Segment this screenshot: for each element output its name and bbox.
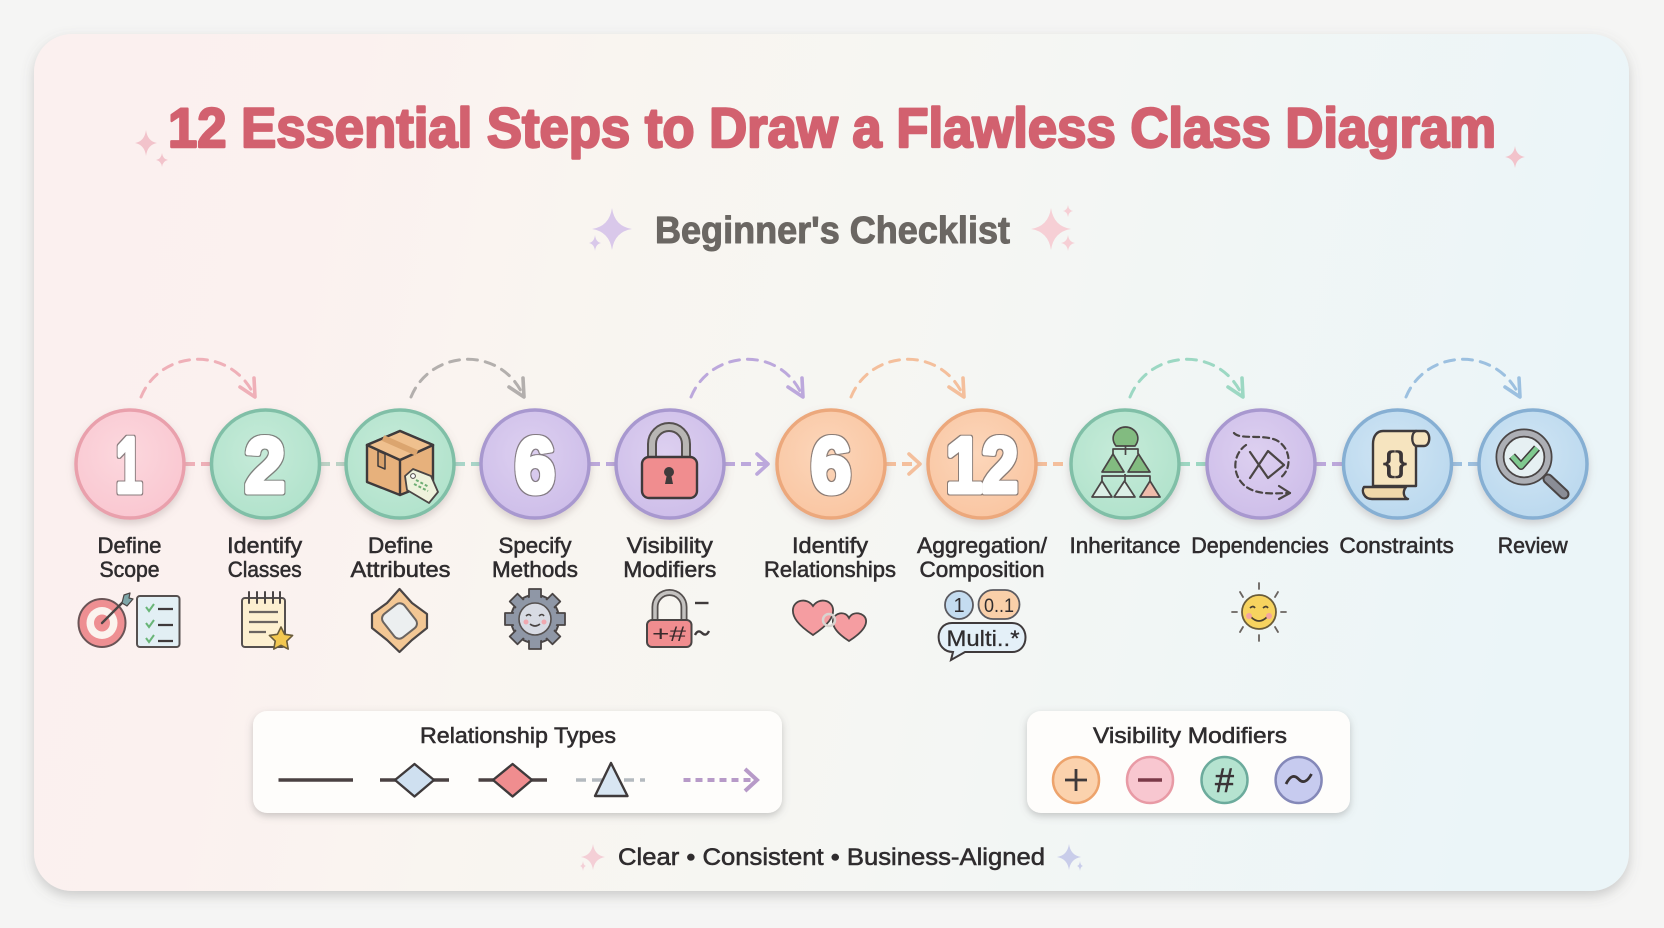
step circle 6 bbox=[777, 410, 885, 518]
icon: smiling sun bbox=[1232, 583, 1286, 641]
icon: rounded diamond tag bbox=[372, 589, 427, 652]
label: Identify bbox=[792, 533, 868, 558]
step 4: Specify Methods bbox=[481, 410, 589, 649]
step circle 3 bbox=[346, 410, 454, 518]
label: Specify bbox=[498, 533, 572, 558]
arrow: arc 5 to 6 bbox=[691, 359, 803, 397]
panel: visibility modifiers legend bbox=[1027, 711, 1350, 813]
label: Scope bbox=[100, 557, 160, 582]
step circle 1 bbox=[76, 410, 184, 518]
arrow: arc 6 to 7 bbox=[851, 359, 964, 397]
aggregation diamond bbox=[380, 764, 449, 796]
hash protected bbox=[1202, 757, 1248, 803]
curved arrows between steps bbox=[141, 359, 1520, 397]
step number 6: 6 bbox=[811, 421, 851, 509]
step 5: Visibility Modifiers bbox=[616, 410, 724, 647]
hash protected: # bbox=[1215, 762, 1234, 800]
label: Review bbox=[1498, 533, 1568, 558]
step circle 4 bbox=[481, 410, 589, 518]
footer tagline: Clear • Consistent • Business-Aligned bbox=[618, 844, 1045, 871]
dependency arrow bbox=[684, 769, 757, 791]
title sparkles bbox=[135, 130, 1525, 168]
step 2: Identify Classes bbox=[212, 410, 320, 649]
step 9: Dependencies bbox=[1191, 410, 1329, 641]
connector 10-11 bbox=[1452, 462, 1478, 466]
arrow: arc 3 to 4 bbox=[411, 359, 524, 397]
step 3: Define Attributes bbox=[346, 410, 454, 652]
icon: padlock bbox=[642, 427, 697, 498]
legend heading: Visibility Modifiers bbox=[1093, 723, 1287, 748]
composition diamond bbox=[478, 764, 547, 796]
connector 1-2 bbox=[185, 462, 212, 466]
label: Constraints bbox=[1339, 533, 1454, 558]
icon: smiling gear bbox=[505, 589, 565, 649]
label: Define bbox=[368, 533, 433, 558]
step circle 9 bbox=[1207, 410, 1315, 518]
icon: target with arrow bbox=[78, 593, 133, 647]
label: Aggregation/ bbox=[917, 533, 1048, 558]
label: Identify bbox=[227, 533, 302, 558]
icon: multiplicity badges: 1 bbox=[953, 595, 965, 617]
arrow 6-7 bbox=[886, 454, 920, 474]
label: Visibility bbox=[627, 533, 713, 558]
connector 3-4 bbox=[455, 462, 481, 466]
label: Attributes bbox=[350, 557, 450, 582]
icon: multiplicity badges: 0..1 bbox=[984, 596, 1014, 617]
step circle 11 bbox=[1479, 410, 1587, 518]
icon: two hearts bbox=[793, 601, 866, 641]
icon: scroll with braces: {} bbox=[1383, 446, 1407, 479]
step 6: Identify Relationships bbox=[764, 410, 896, 641]
icon: inheritance tree bbox=[1092, 427, 1160, 497]
icon: padlock with modifiers bbox=[647, 592, 709, 647]
step circle 7 bbox=[928, 410, 1036, 518]
icon: multiplicity badges bbox=[939, 590, 1026, 660]
legend heading: Relationship Types bbox=[420, 723, 616, 748]
icon: magnifier with check bbox=[1500, 433, 1564, 494]
step number 12: 12 bbox=[946, 421, 1018, 509]
footer sparkles bbox=[580, 844, 1083, 871]
plus public bbox=[1053, 757, 1099, 803]
label: Dependencies bbox=[1191, 533, 1329, 558]
arrow: arc 1 to 2 bbox=[141, 359, 255, 397]
arrow: arc 8 to 9 bbox=[1130, 359, 1243, 397]
connector 2-3 bbox=[320, 462, 346, 466]
minus private bbox=[1127, 757, 1173, 803]
tilde package bbox=[1276, 757, 1322, 803]
title: 12 Essential Steps to Draw a Flawless Class Diagram bbox=[168, 96, 1496, 159]
icon: cardboard box with tag bbox=[367, 431, 438, 503]
association line bbox=[278, 778, 353, 782]
step 7: Aggregation/Composition bbox=[917, 410, 1048, 660]
step circle 8 bbox=[1071, 410, 1179, 518]
icon: checklist bbox=[137, 596, 180, 647]
icon: multiplicity badges: Multi..* bbox=[946, 626, 1020, 651]
step number 1: 1 bbox=[116, 421, 142, 509]
step 11: Review bbox=[1479, 410, 1587, 558]
label: Methods bbox=[492, 557, 578, 582]
connectors between circles bbox=[185, 454, 1478, 474]
connector 8-9 bbox=[1180, 462, 1207, 466]
label: Classes bbox=[228, 557, 302, 582]
connector 9-10 bbox=[1316, 462, 1342, 466]
step circle 2 bbox=[212, 410, 320, 518]
icon: scroll with braces bbox=[1363, 431, 1429, 499]
icon: dependency loop bbox=[1234, 433, 1290, 499]
icon: padlock with modifiers: +# bbox=[652, 623, 686, 646]
step circle 5 bbox=[616, 410, 724, 518]
subtitle sparkles bbox=[589, 205, 1075, 251]
panel: relationship types legend bbox=[253, 711, 782, 813]
label: Relationships bbox=[764, 557, 896, 582]
step number 6: 6 bbox=[515, 421, 555, 509]
step 1: Define Scope bbox=[76, 410, 184, 647]
label: Composition bbox=[920, 557, 1044, 582]
label: Modifiers bbox=[623, 557, 716, 582]
step 8: Inheritance bbox=[1070, 410, 1180, 558]
label: Inheritance bbox=[1070, 533, 1180, 558]
arrow: arc 10 to 11 bbox=[1406, 359, 1520, 397]
arrow 5-6 bbox=[725, 454, 768, 474]
step 10: Constraints bbox=[1339, 410, 1454, 558]
step circle 10 bbox=[1344, 410, 1452, 518]
connector 4-5 bbox=[590, 462, 616, 466]
step number 2: 2 bbox=[245, 421, 285, 509]
connector 7-8 bbox=[1037, 462, 1065, 466]
label: Define bbox=[98, 533, 162, 558]
icon: notepad with star bbox=[242, 592, 293, 649]
inheritance triangle bbox=[576, 763, 645, 796]
subtitle: Beginner's Checklist bbox=[655, 210, 1010, 252]
